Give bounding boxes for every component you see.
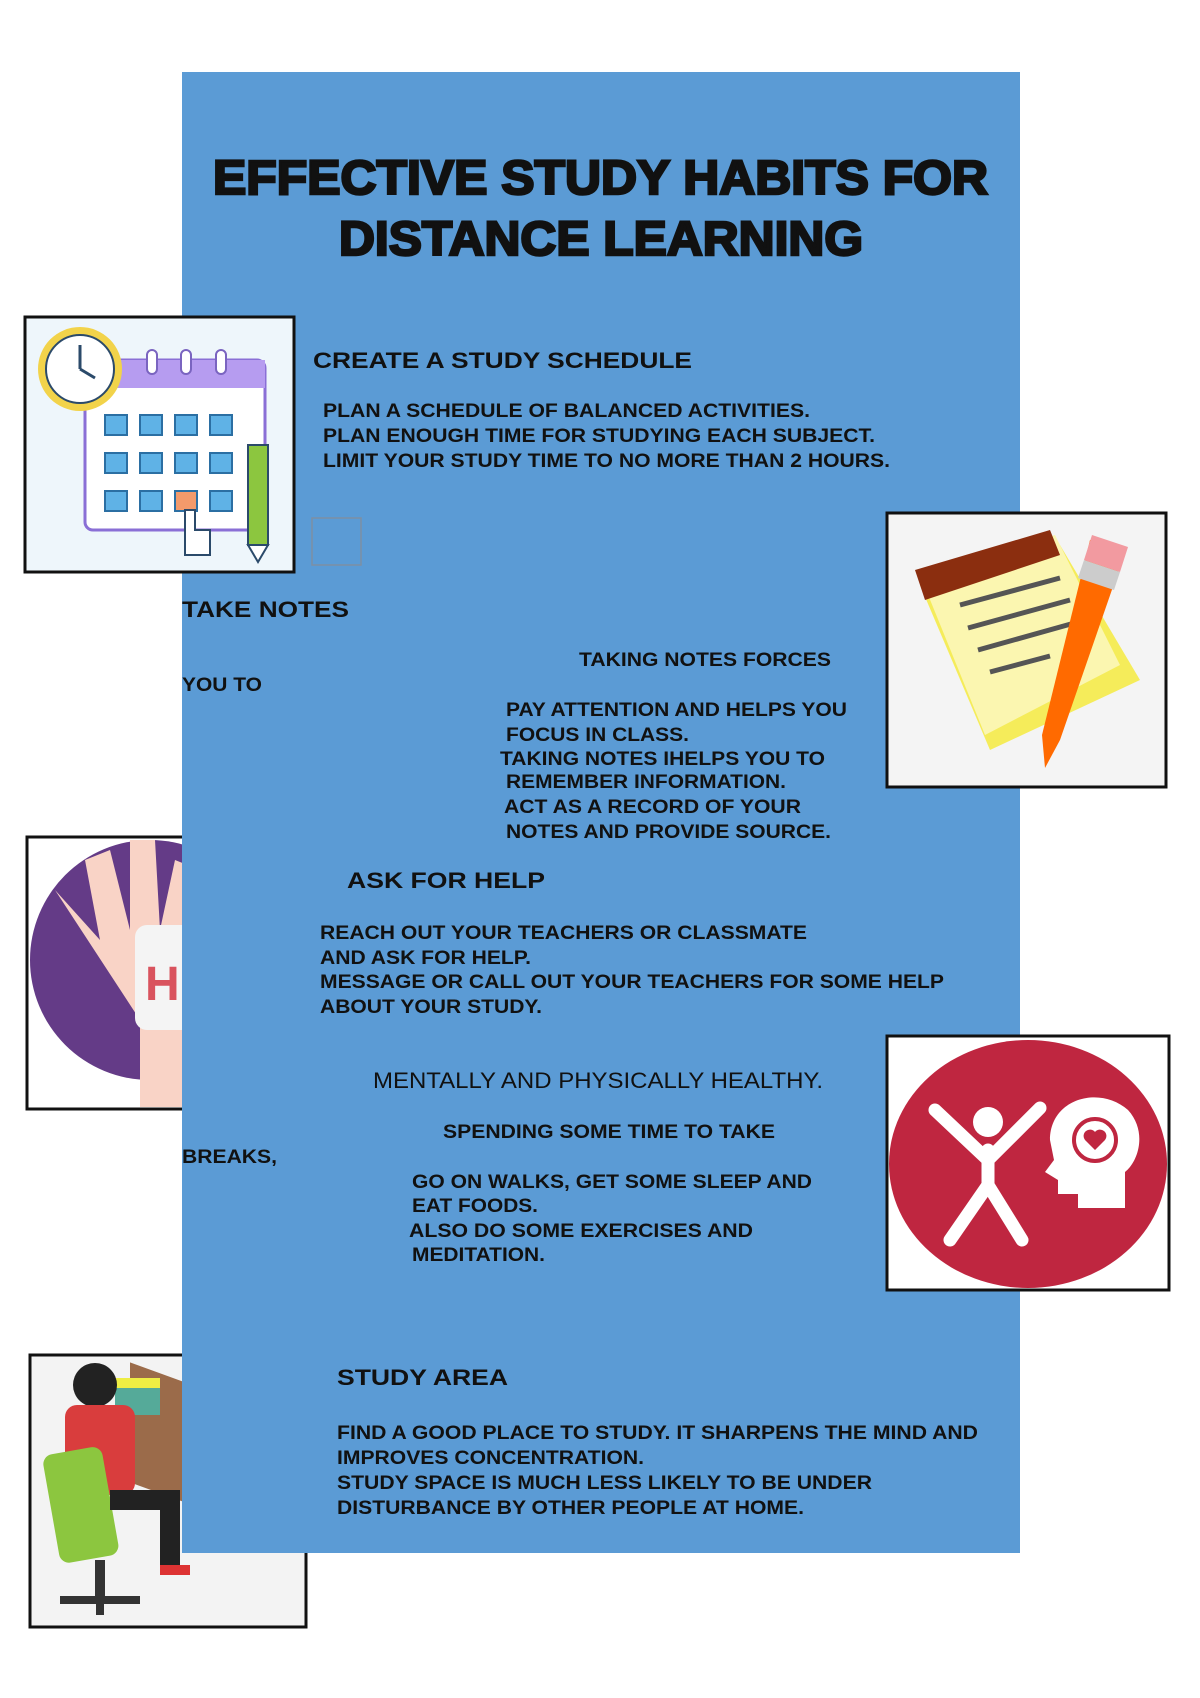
text: health body: EAT FOODS. bbox=[412, 1196, 538, 1217]
icon: help hand: H bbox=[145, 958, 180, 1011]
heading: mentally and physically healthy: MENTALLY AND PHYSICALLY HEALTHY. bbox=[373, 1068, 823, 1093]
text: study area body: IMPROVES CONCENTRATION. bbox=[337, 1448, 644, 1469]
icon: mental and physical health bbox=[887, 1036, 1169, 1290]
title: DISTANCE LEARNING bbox=[339, 213, 863, 266]
text: take notes body: TAKING NOTES FORCES bbox=[579, 650, 831, 671]
text: take notes body bbox=[182, 650, 847, 843]
text: help body bbox=[320, 923, 944, 1018]
text: take notes body: TAKING NOTES IHELPS YOU TO bbox=[500, 749, 825, 770]
icon: study area person at desk bbox=[30, 1355, 306, 1627]
small empty box bbox=[312, 518, 361, 565]
text: schedule bullets: PLAN ENOUGH TIME FOR STUDYING EACH SUBJECT. bbox=[323, 426, 875, 447]
text: health body: ALSO DO SOME EXERCISES AND bbox=[409, 1221, 753, 1242]
text: take notes body: REMEMBER INFORMATION. bbox=[506, 772, 786, 793]
text: help body: AND ASK FOR HELP. bbox=[320, 948, 531, 969]
heading: create a study schedule: CREATE A STUDY SCHEDULE bbox=[313, 348, 692, 373]
text: health body bbox=[182, 1122, 812, 1266]
text: study area body bbox=[337, 1423, 978, 1519]
heading: take notes: TAKE NOTES bbox=[182, 597, 349, 622]
panel: blue background bbox=[182, 72, 1020, 1553]
text: take notes body: PAY ATTENTION AND HELPS YOU bbox=[506, 700, 847, 721]
text: help body: MESSAGE OR CALL OUT YOUR TEACHERS FOR SOME HELP bbox=[320, 972, 944, 993]
text: study area body: FIND A GOOD PLACE TO STUDY. IT SHARPENS THE MIND AND bbox=[337, 1423, 978, 1444]
icon: calendar bbox=[25, 317, 294, 572]
text: health body: BREAKS, bbox=[182, 1147, 277, 1168]
text: schedule bullets: PLAN A SCHEDULE OF BALANCED ACTIVITIES. bbox=[323, 401, 810, 422]
icon: help hand bbox=[26, 836, 182, 1110]
text: take notes body: YOU TO bbox=[182, 675, 262, 696]
text: help body: ABOUT YOUR STUDY. bbox=[320, 997, 542, 1018]
heading: study area: STUDY AREA bbox=[337, 1365, 508, 1390]
text: help body: REACH OUT YOUR TEACHERS OR CLASSMATE bbox=[320, 923, 807, 944]
title bbox=[213, 152, 988, 266]
text: study area body: STUDY SPACE IS MUCH LESS LIKELY TO BE UNDER bbox=[337, 1473, 872, 1494]
text: take notes body: ACT AS A RECORD OF YOUR bbox=[504, 797, 801, 818]
text: schedule bullets bbox=[323, 401, 890, 472]
text: study area body: DISTURBANCE BY OTHER PEOPLE AT HOME. bbox=[337, 1498, 804, 1519]
title: EFFECTIVE STUDY HABITS FOR bbox=[213, 152, 988, 205]
heading: ask for help: ASK FOR HELP bbox=[347, 868, 545, 893]
icon: notepad and pencil bbox=[887, 513, 1166, 787]
text: take notes body: FOCUS IN CLASS. bbox=[506, 725, 689, 746]
text: health body: MEDITATION. bbox=[412, 1245, 545, 1266]
text: health body: GO ON WALKS, GET SOME SLEEP AND bbox=[412, 1172, 812, 1193]
text: take notes body: NOTES AND PROVIDE SOURCE. bbox=[506, 822, 831, 843]
text: schedule bullets: LIMIT YOUR STUDY TIME TO NO MORE THAN 2 HOURS. bbox=[323, 451, 890, 472]
text: health body: SPENDING SOME TIME TO TAKE bbox=[443, 1122, 775, 1143]
